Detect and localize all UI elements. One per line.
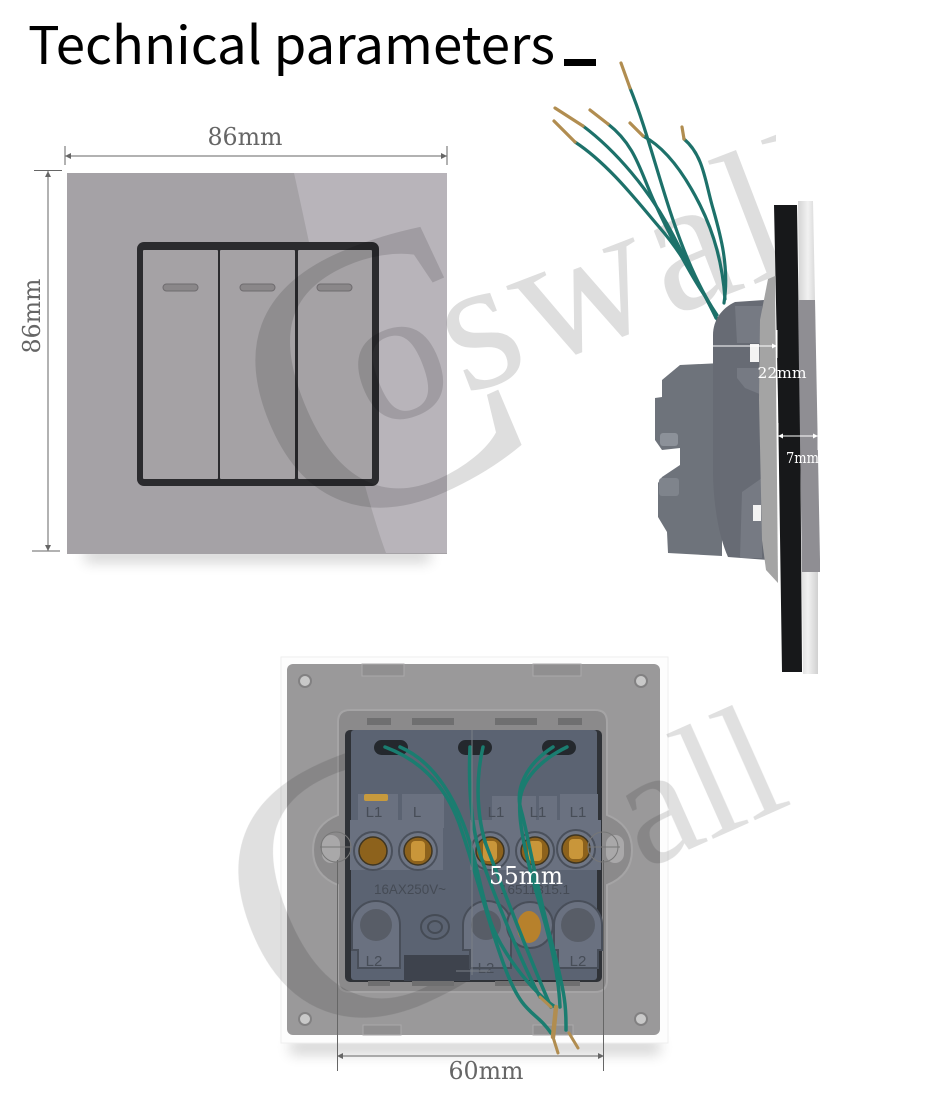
- panel: back switch module: [345, 718, 602, 1053]
- dimension: 86mm width: 86mm: [208, 123, 283, 151]
- watermark: front and side: oswall: [312, 88, 873, 470]
- rear terminal blocks: [655, 363, 722, 556]
- wire slots: [374, 740, 576, 755]
- right key: [298, 250, 372, 479]
- silver edge top and bottom: [798, 201, 818, 674]
- upper terminal labels: L1: [366, 804, 382, 821]
- middle key: [220, 250, 295, 479]
- rating text and certification mark: 16AX250V~: [374, 882, 446, 897]
- lower brass screw: [517, 911, 541, 943]
- body facets: [735, 306, 762, 558]
- light grey mount: [759, 276, 778, 583]
- panel: front view of switch: [67, 173, 447, 562]
- wires bundle: [575, 88, 726, 319]
- upper terminal labels: L: [413, 804, 421, 821]
- watermark: front and side: [256, 134, 776, 508]
- dimension: 7mm thickness: 7mm: [786, 449, 819, 467]
- dimension: 22mm depth: 22mm: [758, 364, 806, 382]
- upper terminal labels: L1: [570, 804, 586, 821]
- watermark: back: all: [583, 669, 808, 903]
- dimension: 22mm depth: [713, 330, 806, 382]
- dimension: 60mm horizontal: [320, 832, 620, 1085]
- infographic canvas: [22, 22, 820, 1080]
- dimension: 55mm vertical: [456, 730, 563, 975]
- dimension: 86mm width: [65, 123, 447, 165]
- white clip lower: [753, 505, 761, 521]
- panel: back view of switch: [281, 657, 668, 1054]
- watermark: back: [150, 636, 808, 1114]
- watermark: front and side: C: [167, 126, 580, 627]
- white clip upper: [750, 344, 759, 362]
- dark body: [345, 730, 602, 982]
- lower terminal labels: L2: [478, 960, 494, 977]
- button frame: [137, 242, 379, 486]
- black front plate: [774, 205, 802, 672]
- lower terminal blocks: [352, 901, 602, 968]
- lower terminal labels: L2: [366, 953, 382, 970]
- grey glass mid section: [798, 300, 820, 572]
- rating text and certification mark: 16511315.1: [500, 882, 570, 897]
- dimension: 55mm vertical: 55mm: [489, 862, 563, 890]
- body face: [351, 730, 597, 980]
- lower terminal labels: [366, 953, 586, 977]
- terminal screw threads: [411, 839, 583, 861]
- left key: [143, 250, 218, 479]
- dimension: 86mm height: [18, 170, 62, 551]
- wire brass tips: [554, 63, 684, 142]
- terminal screw brass: [359, 835, 590, 865]
- upper terminal blocks: [350, 794, 601, 870]
- upper terminal labels: L1: [488, 804, 504, 821]
- upper terminal labels: [366, 804, 586, 821]
- corner screw holes: [299, 675, 647, 1025]
- lower terminal labels: L2: [570, 953, 586, 970]
- lug slots: [322, 835, 340, 863]
- edge clips: [362, 664, 581, 1035]
- panel: side view of switch: [554, 63, 820, 674]
- lower recess: [404, 955, 470, 981]
- main dark body: [713, 300, 768, 560]
- dimension: 60mm horizontal: 60mm: [448, 1057, 524, 1085]
- lower cylinder highlight: [659, 478, 679, 496]
- title: Technical parameters: [28, 4, 555, 79]
- upper cylinder highlight: [660, 433, 678, 446]
- upper terminal labels: L1: [530, 804, 546, 821]
- frame notches: [367, 718, 582, 986]
- lower terminal recesses: [360, 908, 595, 942]
- green wires: [385, 747, 567, 1033]
- wire brass tips on back: [540, 997, 578, 1053]
- mount frame with side screw lugs: [313, 710, 632, 992]
- rating text and certification mark: [374, 882, 570, 939]
- glass reflection: [294, 173, 447, 553]
- dimension: 7mm thickness: [778, 423, 819, 467]
- gold contact: [364, 794, 388, 801]
- dimension: 86mm height: 86mm: [18, 278, 46, 354]
- terminal screw surrounds: [354, 830, 595, 870]
